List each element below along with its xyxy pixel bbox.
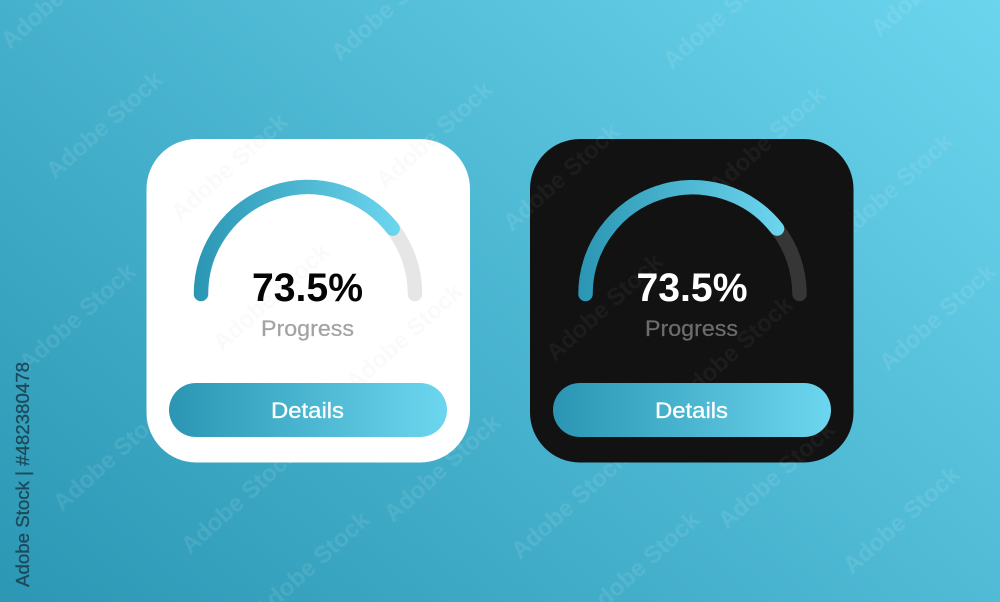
card watermarks: dark: Adobe Stock: [671, 291, 799, 409]
button: dark: Details: [655, 398, 728, 423]
button: light: Details: [271, 398, 344, 423]
watermarks: Adobe Stock: [371, 76, 499, 194]
watermarks: Adobe Stock: [704, 81, 832, 199]
card watermarks: light: Adobe Stock: [166, 108, 294, 226]
label: dark: Progress: [645, 316, 738, 341]
value: light: 73.5%: [252, 266, 363, 310]
stock id side text: Adobe Stock | #482380478: [13, 362, 33, 587]
gauge: light: [201, 187, 415, 294]
button: light: [169, 383, 447, 437]
watermarks: Adobe Stock: [48, 398, 176, 516]
card watermarks: dark: Adobe Stock: [704, 81, 832, 199]
watermarks: Adobe Stock: [838, 461, 966, 579]
watermarks: Adobe Stock: [14, 258, 142, 376]
label: light: Progress: [261, 316, 354, 341]
watermarks: Adobe Stock: [498, 118, 626, 236]
watermarks: Adobe Stock: [831, 128, 959, 246]
watermarks: Adobe Stock: [41, 66, 169, 184]
watermarks: Adobe Stock: [166, 108, 294, 226]
card watermarks: dark: Adobe Stock: [498, 118, 626, 236]
card watermarks: light: Adobe Stock: [341, 278, 469, 396]
panel: dark progress card: [530, 139, 854, 462]
card watermarks: dark: [530, 139, 836, 462]
watermarks: Adobe Stock: [874, 258, 1000, 376]
button: dark: [553, 383, 831, 437]
value: dark: 73.5%: [636, 266, 748, 310]
panel: light progress card: [146, 139, 470, 462]
watermarks: Adobe Stock: [506, 446, 634, 564]
card background: dark: [530, 139, 854, 462]
card background: light: [146, 139, 470, 462]
watermarks: Adobe Stock: [379, 409, 507, 527]
card watermarks: light: Adobe Stock: [371, 76, 499, 194]
gauge: dark: [586, 187, 800, 294]
card watermarks: light: [166, 76, 499, 396]
card watermarks: light: Adobe Stock: [208, 238, 336, 356]
watermarks: Adobe Stock: [713, 416, 841, 534]
watermarks: Adobe Stock: [176, 441, 304, 559]
card watermarks: dark: Adobe Stock: [713, 416, 841, 534]
card watermarks: dark: Adobe Stock: [541, 248, 669, 366]
